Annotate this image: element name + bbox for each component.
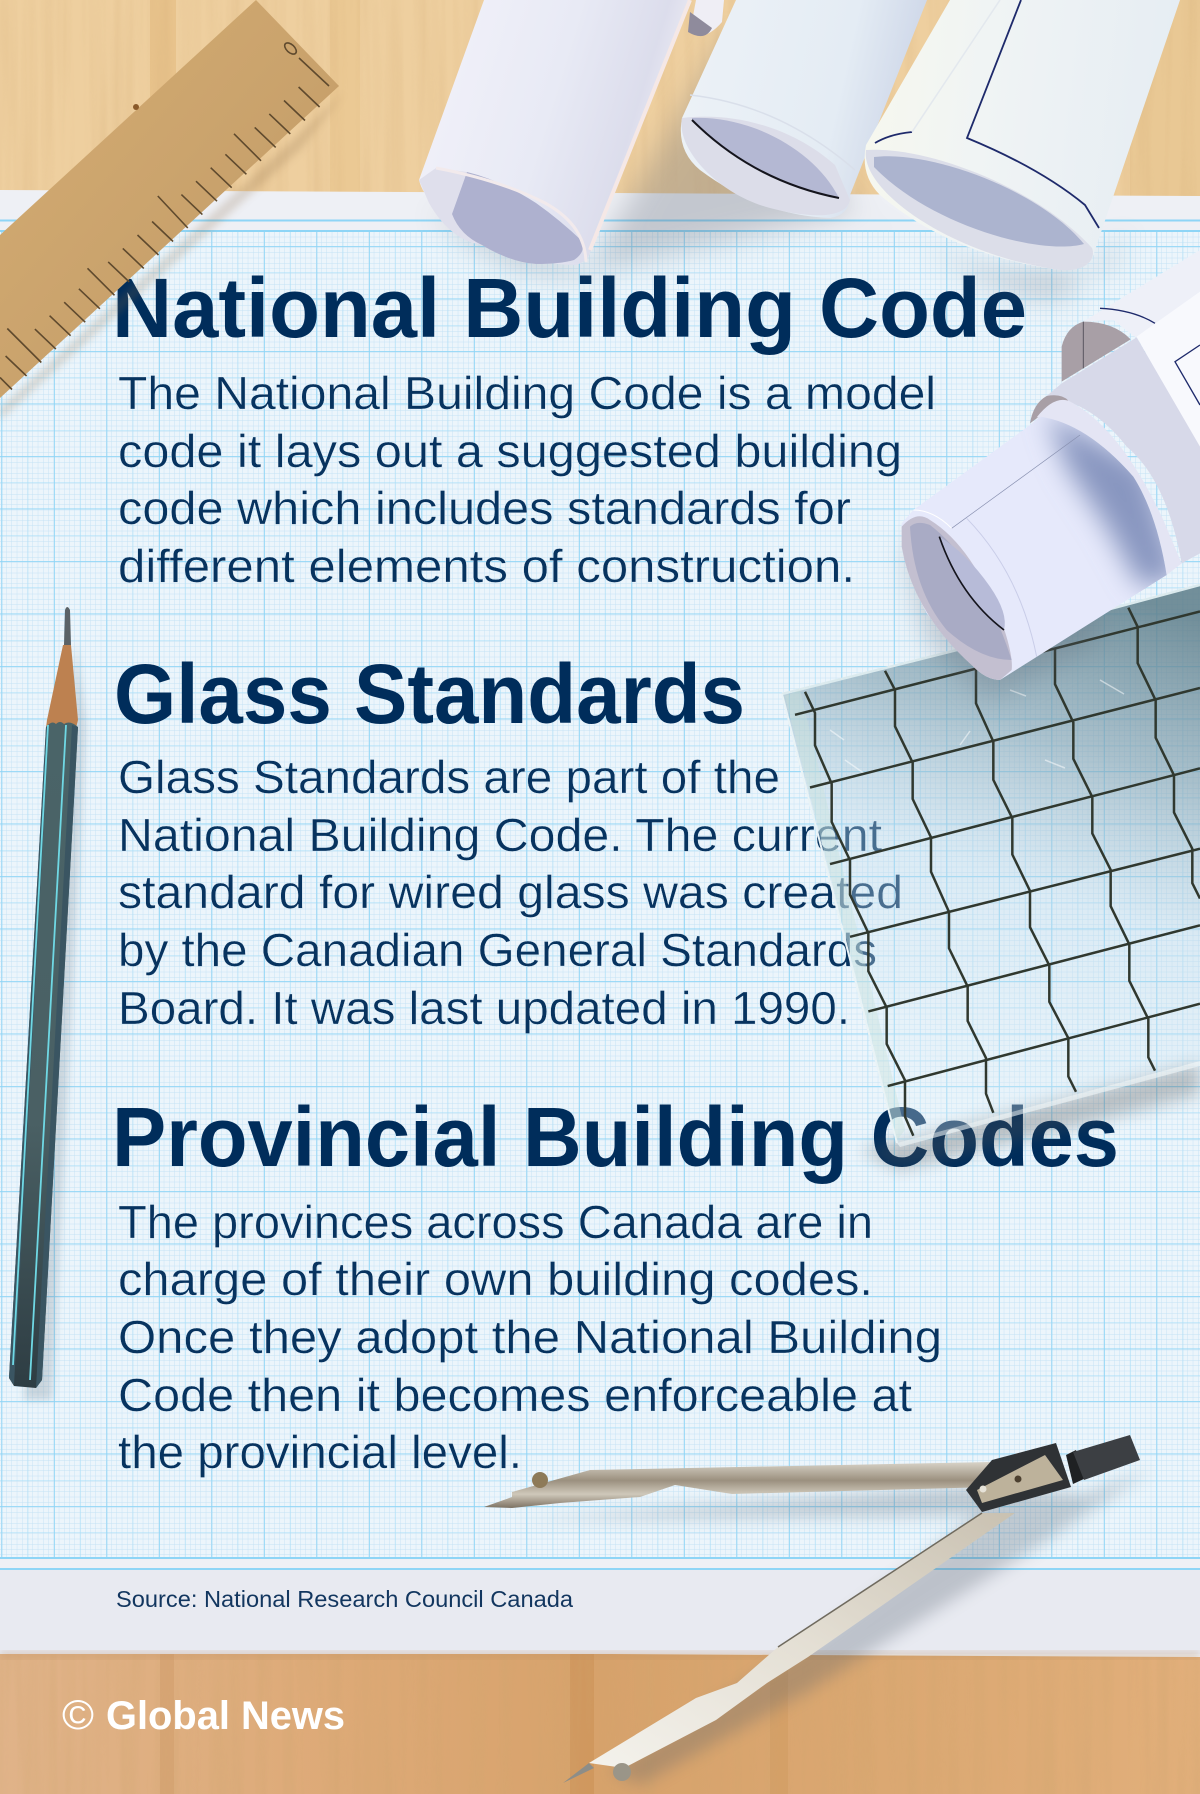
scroll shadows — [430, 30, 1130, 700]
copyright: Global News: Global News — [106, 1694, 345, 1738]
text block: National Building Code description: The National Building Code is a model — [118, 367, 936, 419]
scroll B — [681, 0, 927, 218]
text block: Glass Standards description: Board. It was last updated in 1990. — [118, 982, 850, 1034]
text block: Provincial Building Codes description: the provincial level. — [118, 1426, 522, 1478]
text block: Glass Standards description — [118, 751, 903, 1034]
source note: Source: National Research Council Canada — [116, 1586, 574, 1612]
icon: wired glass pane — [782, 585, 1200, 1170]
compass upper arm — [484, 1462, 992, 1508]
icon: drawing compass — [484, 1435, 1150, 1785]
copyright: Global News: © — [62, 1691, 94, 1738]
text block: National Building Code description: different elements of construction. — [118, 540, 855, 592]
pencil lead — [64, 607, 71, 645]
icon: pencil — [9, 607, 86, 1400]
compass head — [966, 1435, 1140, 1512]
heading: National Building Code: National Building Code — [112, 261, 1027, 355]
text block: National Building Code description: code which includes standards for — [118, 482, 851, 534]
scroll A — [419, 0, 724, 265]
text block: Provincial Building Codes description: The provinces across Canada are in — [118, 1196, 873, 1248]
text block: Provincial Building Codes description: Once they adopt the National Building — [118, 1311, 942, 1363]
text block: Provincial Building Codes description — [118, 1196, 942, 1478]
heading: Provincial Building Codes: Provincial Building Codes — [112, 1090, 1119, 1184]
pencil body — [9, 722, 78, 1388]
text block: Provincial Building Codes description: charge of their own building codes. — [118, 1253, 873, 1305]
text block: National Building Code description: code it lays out a suggested building — [118, 425, 902, 477]
scroll D — [902, 250, 1200, 680]
text block: Glass Standards description: Glass Standards are part of the — [118, 751, 780, 803]
scroll C — [865, 0, 1180, 270]
compass lower arm — [563, 1513, 1015, 1783]
icon: rolled blueprints — [419, 0, 1200, 700]
pencil wood tip — [46, 645, 78, 728]
icon: wooden ruler — [0, 0, 345, 420]
text block: Glass Standards description: standard for wired glass was created — [118, 866, 903, 918]
text block: Glass Standards description: by the Canadian General Standards — [118, 924, 877, 976]
heading: Glass Standards: Glass Standards — [114, 647, 745, 741]
text block: National Building Code description — [118, 367, 936, 592]
text block: Glass Standards description: National Building Code. The current — [118, 809, 882, 861]
text block: Provincial Building Codes description: Code then it becomes enforceable at — [118, 1369, 912, 1421]
